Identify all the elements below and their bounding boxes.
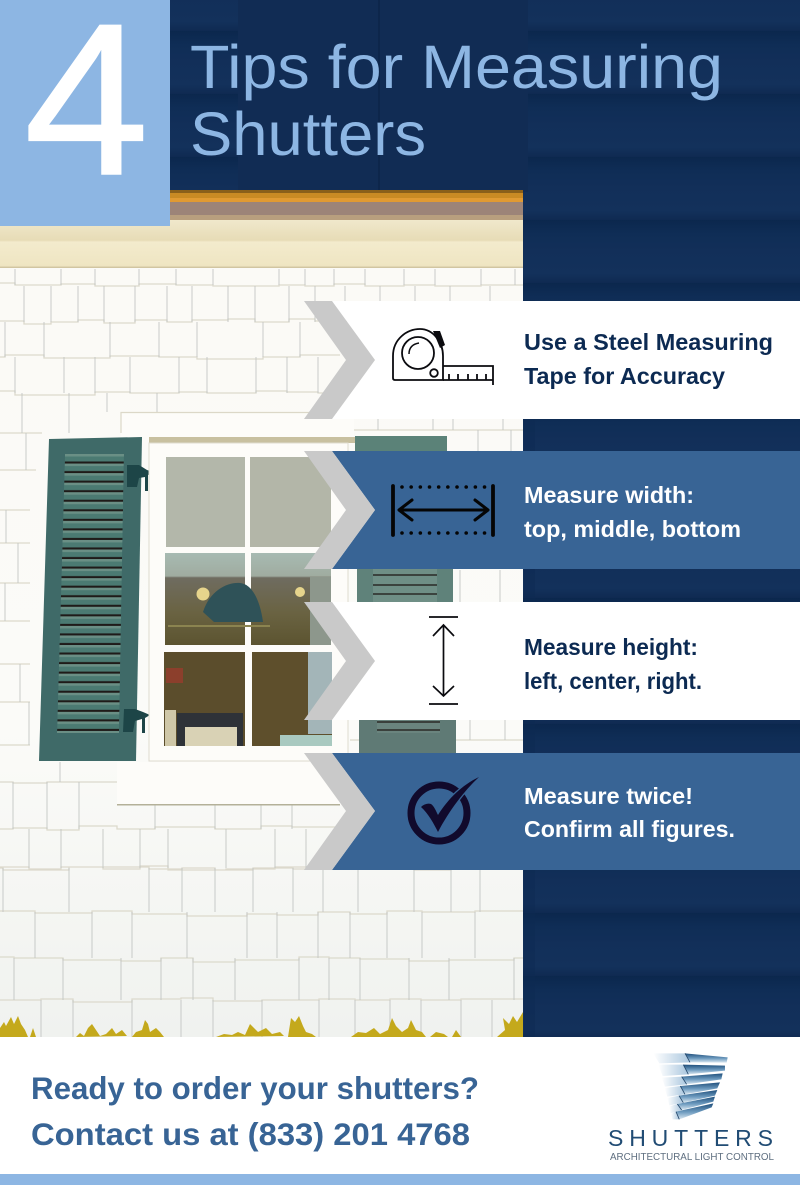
title: Tips for Measuring [190,33,723,101]
chevron [304,301,375,419]
text: tip 2: top, middle, bottom [524,516,741,542]
interior objects [165,652,332,746]
text: tip 2 [524,482,741,542]
icon: height arrow [429,617,458,704]
pane: middle left [165,553,245,645]
footer panel [0,1037,800,1185]
text: tip 3: left, center, right. [524,668,702,694]
logo: Shutters [608,1053,774,1163]
text: tip 4 [524,783,735,842]
text: tip 1: Tape for Accuracy [524,363,725,389]
reflection details [168,577,331,645]
photo: white shingled wall [0,268,523,1037]
window: six-pane sash [149,437,355,761]
title: Shutters [190,100,426,168]
text: tip 3 [524,634,702,694]
shingle joints [0,269,523,1037]
big number 4 panel [0,0,170,226]
icon: width arrow [393,486,493,535]
tip 2: measure width [304,451,800,569]
call to action [31,1070,479,1152]
pane: upper left [166,457,245,547]
pane: bottom right [252,652,332,746]
bushes: yellow foliage [0,1012,523,1037]
hinge: top [127,465,153,491]
chevron [304,602,375,720]
call to action: Ready to order your shutters? [31,1070,479,1106]
call to action: Contact us at (833) 201 4768 [31,1116,470,1152]
tip 1: steel measuring tape [304,301,800,419]
logo mark: slats [653,1053,728,1119]
text: tip 4: Confirm all figures. [524,816,735,842]
roof trim: cream fascia [0,220,523,268]
pane: middle right [251,553,331,645]
right shutter: partly hidden behind banners [355,436,456,753]
text: tip 3: Measure height: [524,634,698,660]
title [190,33,723,168]
pane: bottom left [164,652,245,746]
wordmark: SHUTTERS [608,1125,773,1151]
chevron [304,753,375,870]
text: tip 1 [524,329,773,389]
tip 4: measure twice [304,753,800,870]
gutter: copper strip [170,190,523,220]
icon: check mark in circle [411,777,479,841]
text: tip 1: Use a Steel Measuring [524,329,773,355]
hinge: bottom [123,709,150,733]
tagline: ARCHITECTURAL LIGHT CONTROL [610,1151,774,1163]
icon: tape measure [393,329,493,385]
window trim box [117,412,354,806]
text: tip 4: Measure twice! [524,783,693,809]
left shutter: green louvered [39,437,153,761]
tip 3: measure height [304,602,800,720]
chevron [304,451,375,569]
text: tip 2: Measure width: [524,482,694,508]
pane: upper right [250,457,331,547]
